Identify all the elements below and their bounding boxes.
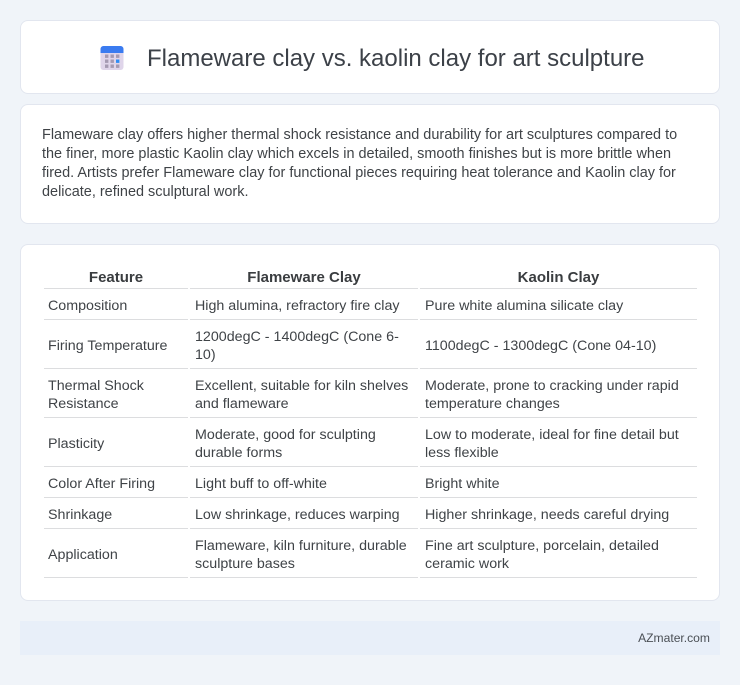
row: composition: Composition [48,298,127,314]
title: Flameware clay vs. kaolin clay for art sculpture [147,45,645,72]
row: plasticity: less flexible [425,445,499,461]
row: firing temperature: 1200degC - 1400degC (Cone 6- [195,329,399,345]
row: firing temperature: 10) [195,347,216,363]
summary text: Flameware clay offers higher thermal shock resistance and durability for art sculptures compared to [42,127,677,143]
row: composition [48,298,624,314]
panel: comparison table [20,244,720,601]
row: thermal shock resistance: temperature changes [425,396,560,412]
summary text: delicate, refined sculptural work. [42,184,248,200]
icon: calendar [100,46,124,70]
table header: Feature [89,269,143,286]
row: color after firing: Light buff to off-white [195,476,327,492]
row: thermal shock resistance: Thermal Shock [48,378,144,394]
footer credit: AZmater.com [638,631,710,645]
table header: Kaolin Clay [518,269,599,286]
row: thermal shock resistance: and flameware [195,396,289,412]
row: composition: Pure white alumina silicate clay [425,298,623,314]
row: shrinkage [48,507,669,523]
row: thermal shock resistance [48,378,679,412]
row: shrinkage: Shrinkage [48,507,112,523]
summary text: fired. Artists prefer Flameware clay for functional pieces requiring heat tolerance and Kaolin clay for [42,165,676,181]
row: plasticity: durable forms [195,445,282,461]
row: application [48,538,659,572]
row: plasticity: Low to moderate, ideal for fine detail but [425,427,679,443]
row: plasticity: Plasticity [48,436,104,452]
panel: summary [20,104,720,224]
row: thermal shock resistance: Excellent, suitable for kiln shelves [195,378,408,394]
row: thermal shock resistance: Resistance [48,396,119,412]
row: application: Application [48,547,118,563]
row: firing temperature: Firing Temperature [48,338,167,354]
footer bar [20,621,720,655]
row: color after firing: Color After Firing [48,476,155,492]
row: shrinkage: Higher shrinkage, needs careful drying [425,507,669,523]
row: application: sculpture bases [195,556,295,572]
row: application: Flameware, kiln furniture, durable [195,538,407,554]
row: thermal shock resistance: Moderate, prone to cracking under rapid [425,378,679,394]
row: firing temperature: 1100degC - 1300degC (Cone 04-10) [425,338,656,354]
table header: Flameware Clay [247,269,361,286]
row: color after firing: Bright white [425,476,500,492]
summary text [42,127,677,200]
row: firing temperature [48,329,656,363]
row: plasticity [48,427,679,461]
row: application: Fine art sculpture, porcelain, detailed [425,538,659,554]
row: application: ceramic work [425,556,509,572]
summary text: the finer, more plastic Kaolin clay which excels in detailed, smooth finishes but is more brittle when [42,146,671,162]
row: composition: High alumina, refractory fire clay [195,298,400,314]
title panel [20,20,720,94]
row: color after firing [48,476,500,492]
row: plasticity: Moderate, good for sculpting [195,427,376,443]
table header [89,269,600,286]
row: shrinkage: Low shrinkage, reduces warping [195,507,400,523]
